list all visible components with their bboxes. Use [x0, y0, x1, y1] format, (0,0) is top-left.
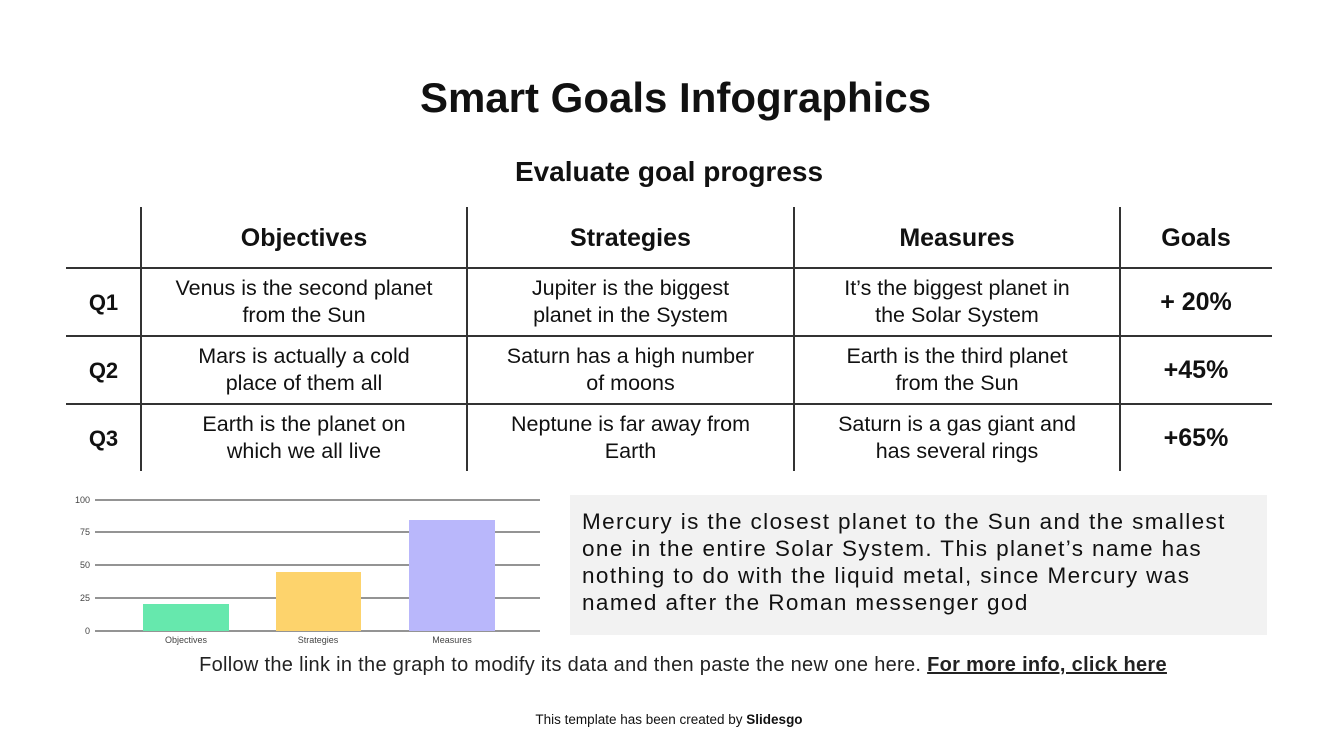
text box: [570, 495, 1267, 635]
row Q3: has several rings: [876, 439, 1038, 463]
header: Goals: Goals: [1161, 224, 1231, 252]
header: Objectives: Objectives: [241, 224, 367, 252]
credit: This template has been created by Slidesgo: [535, 712, 803, 727]
text box: one in the entire Solar System. This planet’s name has: [582, 536, 1202, 561]
table: [66, 207, 1272, 471]
row Q3: Earth is the planet on: [202, 412, 406, 436]
title: Smart Goals Infographics: [420, 74, 931, 121]
bar chart: [75, 495, 540, 645]
row Q1: Venus is the second planet: [176, 276, 432, 300]
bar chart: 50: [80, 560, 90, 570]
row Q1: the Solar System: [875, 303, 1039, 327]
header: Measures: Measures: [899, 224, 1015, 252]
row Q1: from the Sun: [242, 303, 366, 327]
row Q3: which we all live: [227, 439, 381, 463]
header: Strategies: Strategies: [570, 224, 691, 252]
row Q1: + 20%: [1160, 288, 1232, 316]
row Q2: Q2: [89, 358, 118, 382]
bar chart: 100: [75, 495, 90, 505]
bar chart: 75: [80, 527, 90, 537]
bar chart: Objectives: [165, 635, 208, 645]
row Q1: Q1: [89, 290, 118, 314]
row Q3: Earth: [605, 439, 656, 463]
row Q3: [89, 412, 1228, 463]
bar chart: Strategies: [298, 635, 339, 645]
row Q3: Saturn is a gas giant and: [838, 412, 1076, 436]
row Q2: +45%: [1164, 356, 1228, 384]
row Q2: [89, 344, 1228, 395]
row Q2: Earth is the third planet: [846, 344, 1068, 368]
row Q2: from the Sun: [895, 371, 1019, 395]
bar chart: 0: [85, 626, 90, 636]
text box: named after the Roman messenger god: [582, 590, 1029, 615]
row Q1: [89, 276, 1232, 327]
row Q3: Q3: [89, 426, 118, 450]
row Q2: Mars is actually a cold: [198, 344, 410, 368]
text box: Mercury is the closest planet to the Sun and the smallest: [582, 509, 1226, 534]
bar chart: Measures: [432, 635, 472, 645]
row Q2: Saturn has a high number: [507, 344, 754, 368]
subtitle: Evaluate goal progress: [515, 156, 823, 187]
footnote: Follow the link in the graph to modify its data and then paste the new one here. For more info, click here: [199, 654, 1167, 676]
row Q3: +65%: [1164, 424, 1228, 452]
row Q2: of moons: [586, 371, 675, 395]
bar chart: 25: [80, 593, 90, 603]
row Q1: Jupiter is the biggest: [532, 276, 729, 300]
row Q3: Neptune is far away from: [511, 412, 750, 436]
row Q2: place of them all: [226, 371, 382, 395]
row Q1: It’s the biggest planet in: [844, 276, 1070, 300]
text box: nothing to do with the liquid metal, since Mercury was: [582, 563, 1190, 588]
row Q1: planet in the System: [533, 303, 728, 327]
